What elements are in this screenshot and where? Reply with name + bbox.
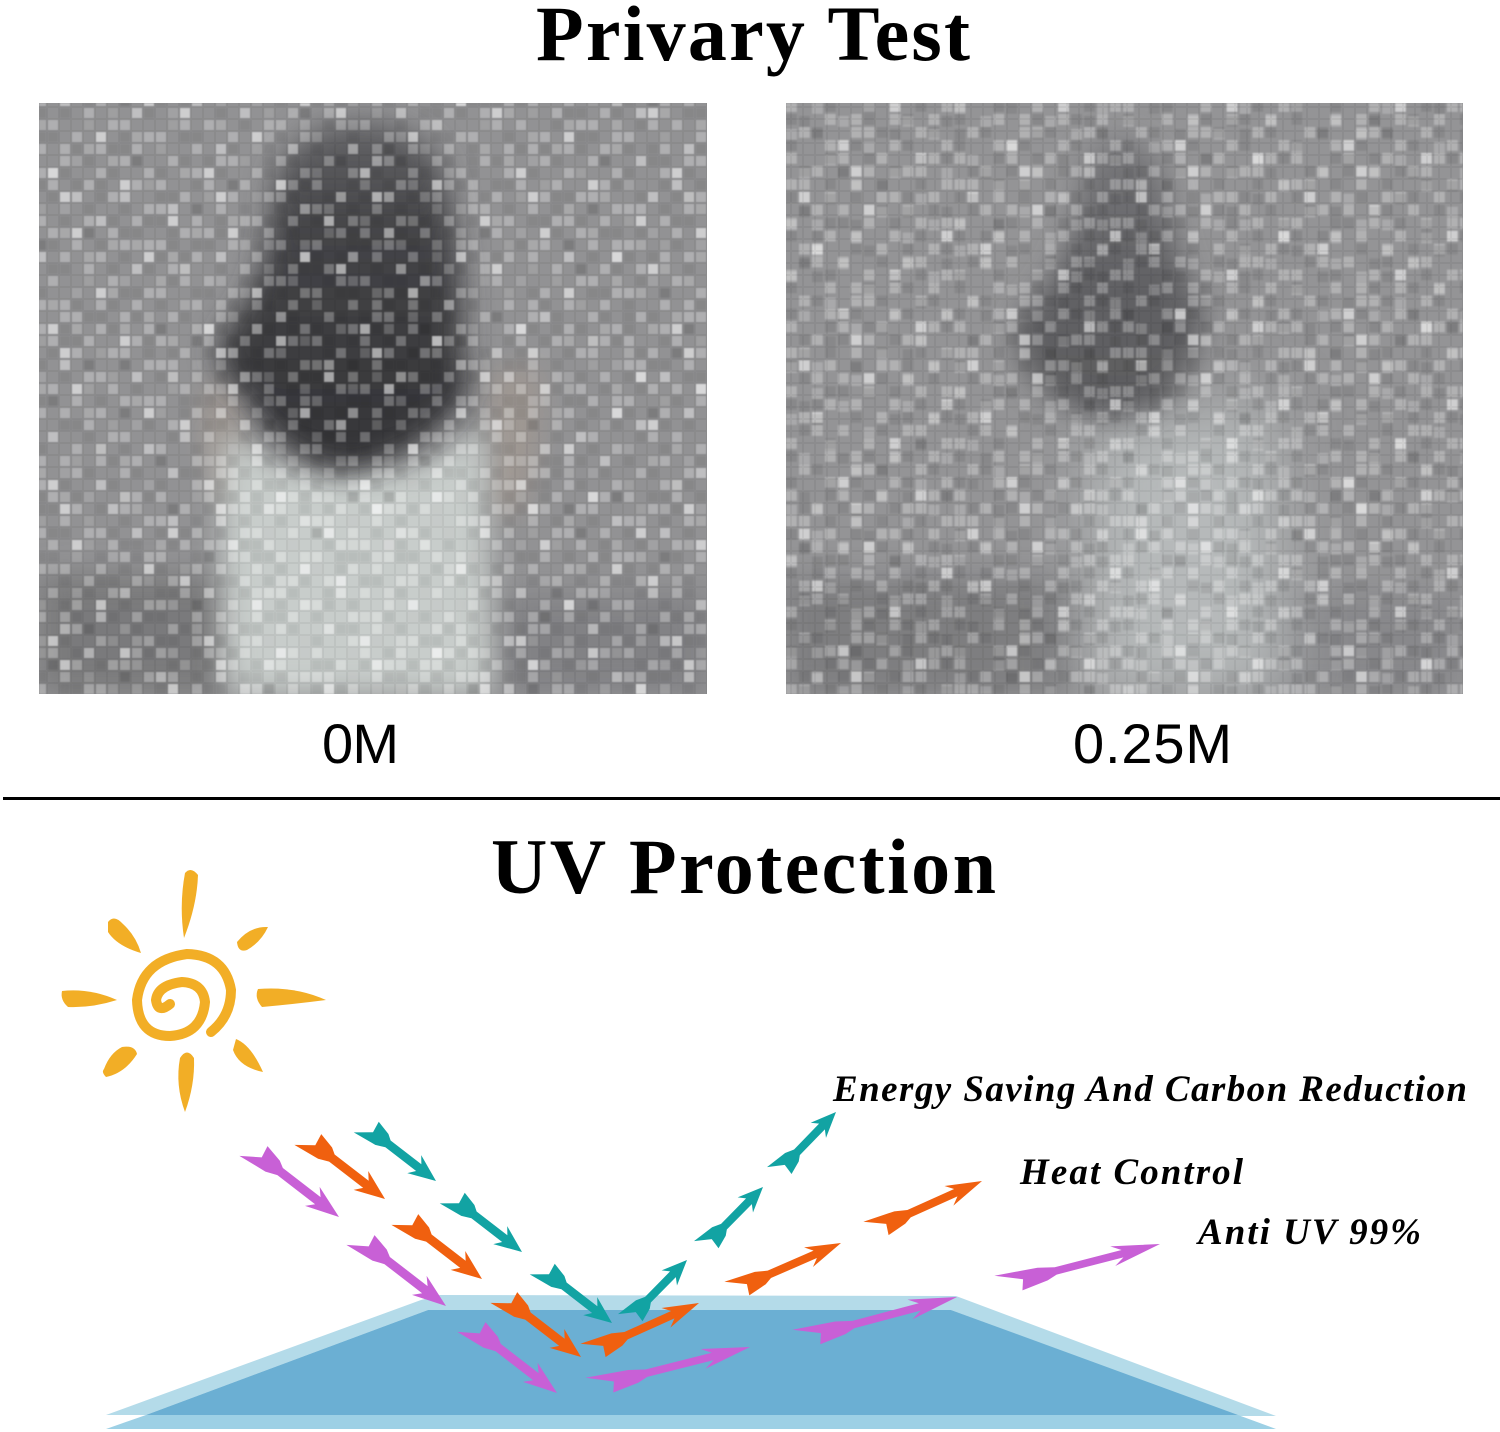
heading: UV Protection: UV Protection (491, 823, 996, 910)
film: glass pane (106, 1295, 1276, 1429)
panel: photo at 0.25M (786, 103, 1463, 694)
label: Anti UV 99%: Anti UV 99% (1196, 1212, 1421, 1253)
arrows: incoming teal (354, 1114, 619, 1332)
label: Heat Control: Heat Control (1019, 1152, 1244, 1193)
arrows: incoming orange (294, 1125, 589, 1367)
label: Energy Saving And Carbon Reduction: Energy Saving And Carbon Reduction (832, 1069, 1467, 1110)
caption: 0M: 0M (322, 712, 399, 775)
icon: sun (62, 870, 326, 1112)
arrows: incoming purple (239, 1136, 565, 1403)
caption: 0.25M: 0.25M (1073, 712, 1232, 775)
arrows: reflected teal (618, 1104, 844, 1330)
arrows: reflected orange (580, 1171, 987, 1364)
arrows: reflected purple (585, 1234, 1163, 1398)
panel: photo at 0M (39, 103, 707, 694)
